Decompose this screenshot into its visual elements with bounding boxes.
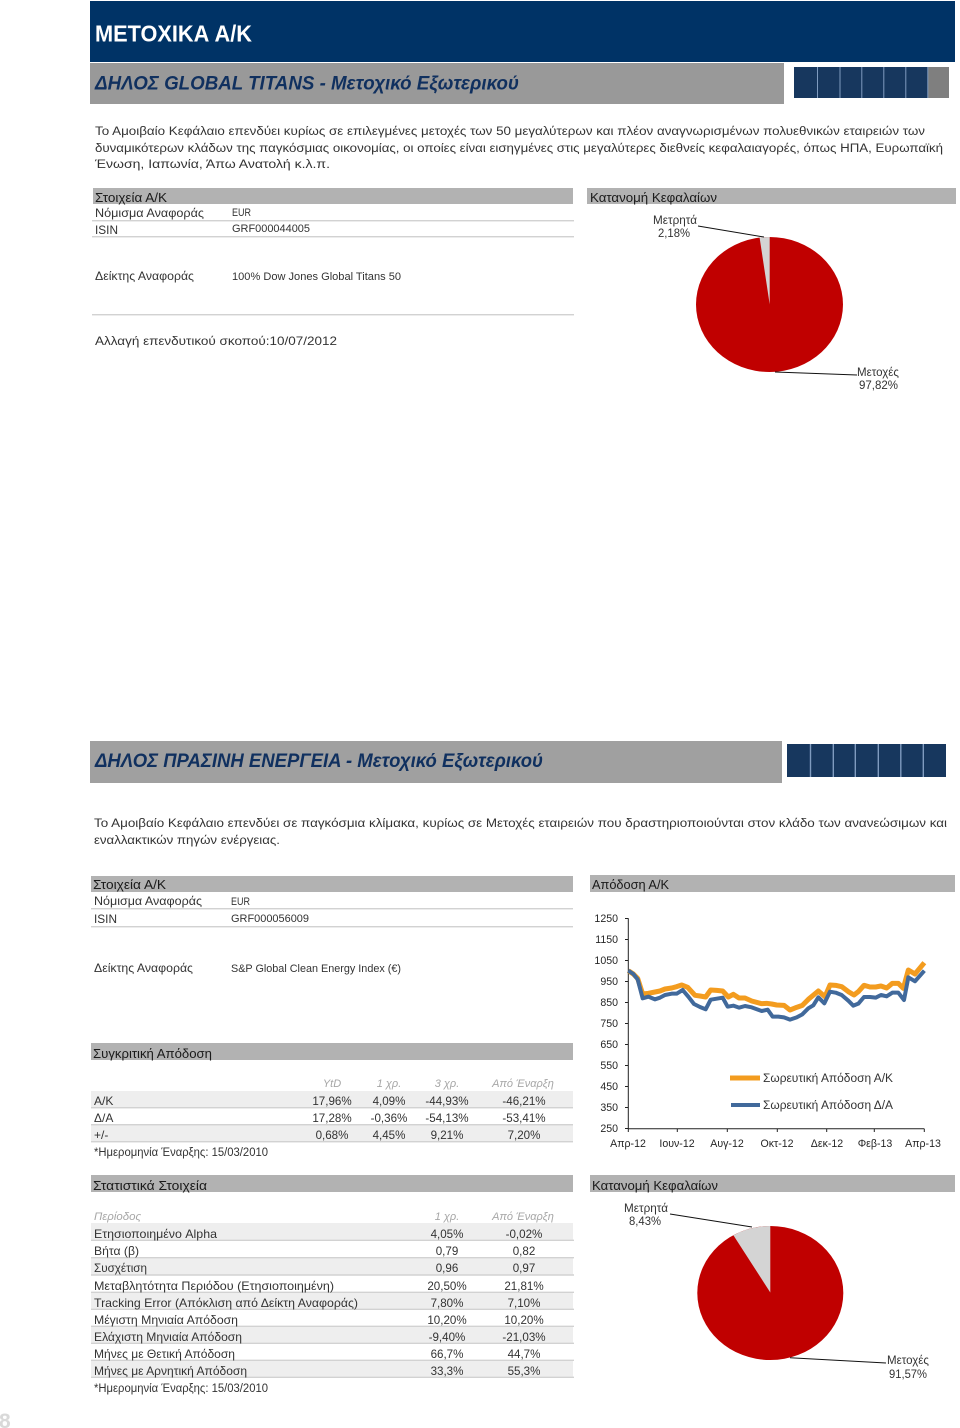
fund details table [91, 876, 573, 975]
cumulative performance line chart: Απρ-13 [905, 1138, 941, 1150]
title banner [90, 1, 955, 62]
statistics table: Μήνες με Θετική Απόδοση [94, 1347, 235, 1361]
cumulative performance line chart: Σωρευτική Απόδοση Δ/Α [763, 1100, 893, 1112]
comparative performance table: 17,96% [312, 1095, 352, 1108]
statistics table: Στατιστικά Στοιχεία [93, 1179, 207, 1193]
statistics table: Tracking Error (Απόκλιση από Δείκτη Αναφοράς) [94, 1296, 358, 1310]
fund description: εναλλακτικών πηγών ενέργειας. [94, 833, 280, 847]
comparative performance table: Συγκριτική Απόδοση [93, 1047, 212, 1061]
statistics table: 1 χρ. [435, 1211, 459, 1223]
fund heading bar [90, 741, 782, 783]
fund details table: GRF000044005 [232, 223, 310, 235]
comparative performance table: -0,36% [371, 1112, 407, 1125]
fund details table: Στοιχεία Α/Κ [93, 878, 167, 892]
fund description: δυναμικότερων κλάδων της παγκόσμιας οικονομίας, οι οποίες είναι εισηγμένες στις μεγαλύτερες διεθνείς κεφαλαιαγορές, όπως ΗΠΑ, Ευρωπαϊκή [95, 141, 943, 155]
comparative performance table: -46,21% [502, 1095, 546, 1108]
fund details table: Νόμισμα Αναφοράς [95, 206, 204, 220]
panel: Dilos Green Energy fund [90, 741, 955, 1395]
fund details table: GRF000056009 [231, 913, 309, 925]
statistics table: 0,79 [436, 1245, 458, 1258]
asset allocation pie chart: Μετοχές [887, 1355, 929, 1367]
comparative performance table: +/- [94, 1128, 108, 1142]
statistics table: *Ημερομηνία Έναρξης: 15/03/2010 [94, 1383, 268, 1395]
comparative performance table: Δ/Α [94, 1111, 113, 1125]
fund description: Ένωση, Ιαπωνία, Άπω Ανατολή κ.λ.π. [94, 157, 330, 171]
statistics table: 4,05% [431, 1228, 463, 1241]
cumulative performance line chart: Απόδοση Α/Κ [592, 878, 670, 892]
statistics table: 7,10% [508, 1297, 540, 1310]
statistics table: Συσχέτιση [94, 1261, 147, 1275]
fund description [94, 816, 947, 847]
asset allocation pie chart: 91,57% [889, 1369, 927, 1381]
asset allocation pie chart: Μετοχές [857, 367, 899, 379]
asset allocation pie chart: 97,82% [859, 380, 898, 392]
statistics table: 10,20% [504, 1314, 544, 1327]
comparative performance table: 0,68% [316, 1129, 348, 1142]
statistics table: 66,7% [431, 1348, 463, 1361]
risk scale icon [787, 744, 946, 777]
statistics table: 0,96 [436, 1262, 458, 1275]
fund details table: EUR [232, 207, 251, 219]
statistics table: Μήνες με Αρνητική Απόδοση [94, 1364, 247, 1378]
cumulative performance line chart: Ιουν-12 [659, 1138, 695, 1150]
risk scale icon [794, 67, 949, 98]
asset allocation pie chart: Κατανομή Κεφαλαίων [590, 191, 717, 205]
statistics table: Μέγιστη Μηνιαία Απόδοση [94, 1313, 238, 1327]
fund description: Το Αμοιβαίο Κεφάλαιο επενδύει κυρίως σε επιλεγμένες μετοχές των 50 μεγαλύτερων και πλέον αναγνωρισμένων πολυεθνικών εταιρειών των [95, 124, 925, 138]
cumulative performance line chart: 1150 [595, 934, 618, 946]
statistics table: 44,7% [508, 1348, 540, 1361]
asset allocation pie chart: 2,18% [658, 228, 690, 240]
comparative performance table: -54,13% [425, 1112, 469, 1125]
asset allocation pie chart: 8,43% [629, 1216, 661, 1228]
cumulative performance line chart: 950 [600, 976, 618, 988]
cumulative performance line chart: 850 [600, 997, 618, 1009]
cumulative performance line chart: 650 [600, 1039, 618, 1051]
statistics table: Βήτα (β) [94, 1244, 139, 1258]
comparative performance table: -53,41% [502, 1112, 546, 1125]
fund details table: 100% Dow Jones Global Titans 50 [232, 271, 401, 283]
cumulative performance line chart: Δεκ-12 [811, 1138, 843, 1150]
fund details table: Νόμισμα Αναφοράς [94, 894, 202, 908]
statistics table: 0,82 [513, 1245, 535, 1258]
cumulative performance line chart: Αυγ-12 [710, 1138, 744, 1150]
asset allocation pie chart: Κατανομή Κεφαλαίων [592, 1179, 718, 1193]
panel: Dilos Global Titans fund [90, 63, 956, 392]
cumulative performance line chart [590, 875, 955, 1150]
title banner: ΜΕΤΟΧΙΚΑ Α/Κ [95, 20, 252, 46]
statistics table: Από Έναρξη [491, 1211, 554, 1223]
fund details table [92, 188, 574, 348]
cumulative performance line chart: 1050 [594, 955, 618, 967]
cumulative performance line chart: 450 [600, 1081, 618, 1093]
cumulative performance line chart: Οκτ-12 [760, 1138, 794, 1150]
cumulative performance line chart: 250 [600, 1123, 618, 1135]
fund heading bar: ΔΗΛΟΣ GLOBAL TITANS - Μετοχικό Εξωτερικού [94, 74, 519, 94]
statistics table: -21,03% [502, 1331, 546, 1344]
comparative performance table: Από Έναρξη [491, 1078, 554, 1090]
fund details table: Αλλαγή επενδυτικού σκοπού:10/07/2012 [95, 334, 337, 348]
comparative performance table: 9,21% [431, 1129, 463, 1142]
comparative performance table: 1 χρ. [377, 1078, 401, 1090]
cumulative performance line chart: 1250 [594, 913, 618, 925]
asset allocation pie chart [587, 188, 956, 392]
statistics table: Ετησιοποιημένο Alpha [94, 1227, 217, 1241]
statistics table: 33,3% [431, 1365, 463, 1378]
cumulative performance line chart: Φεβ-13 [858, 1138, 892, 1150]
comparative performance table: 3 χρ. [435, 1078, 459, 1090]
fund details table: Στοιχεία Α/Κ [95, 191, 168, 205]
asset allocation pie chart: Μετρητά [624, 1203, 668, 1215]
comparative performance table: 4,09% [373, 1095, 405, 1108]
statistics table [91, 1175, 574, 1395]
statistics table: Μεταβλητότητα Περιόδου (Ετησιοποιημένη) [94, 1279, 334, 1293]
comparative performance table: YtD [323, 1078, 341, 1090]
comparative performance table [91, 1043, 573, 1159]
statistics table: 10,20% [427, 1314, 467, 1327]
comparative performance table: *Ημερομηνία Έναρξης: 15/03/2010 [94, 1147, 268, 1159]
fund description [94, 124, 943, 171]
statistics table: 55,3% [508, 1365, 540, 1378]
fund details table: ISIN [94, 912, 117, 926]
cumulative performance line chart: 550 [600, 1060, 618, 1072]
cumulative performance line chart: 350 [600, 1102, 618, 1114]
fund details table: S&P Global Clean Energy Index (€) [231, 963, 401, 975]
asset allocation pie chart: Μετρητά [653, 215, 697, 227]
fund description: Το Αμοιβαίο Κεφάλαιο επενδύει σε παγκόσμια κλίμακα, κυρίως σε Μετοχές εταιρειών που δραστηριοποιούνται στον κλάδο των ανανεώσιμων και [94, 816, 947, 830]
fund heading bar [90, 63, 784, 104]
statistics table: -0,02% [506, 1228, 542, 1241]
statistics table: 20,50% [427, 1280, 467, 1293]
asset allocation pie chart [590, 1175, 955, 1381]
comparative performance table: 17,28% [312, 1112, 352, 1125]
fund heading bar: ΔΗΛΟΣ ΠΡΑΣΙΝΗ ΕΝΕΡΓΕΙΑ - Μετοχικό Εξωτερικού [94, 751, 543, 772]
fund details table: Δείκτης Αναφοράς [95, 269, 194, 283]
comparative performance table: -44,93% [425, 1095, 469, 1108]
cumulative performance line chart: 750 [600, 1018, 618, 1030]
comparative performance table: 7,20% [508, 1129, 540, 1142]
statistics table: Ελάχιστη Μηνιαία Απόδοση [94, 1330, 242, 1344]
fund details table: Δείκτης Αναφοράς [94, 961, 193, 975]
cumulative performance line chart: Απρ-12 [610, 1138, 646, 1150]
comparative performance table: Α/Κ [94, 1094, 113, 1108]
statistics table: -9,40% [429, 1331, 465, 1344]
statistics table: Περίοδος [94, 1211, 142, 1223]
statistics table: 21,81% [504, 1280, 544, 1293]
cumulative performance line chart: Σωρευτική Απόδοση Α/Κ [763, 1073, 893, 1085]
fund details table: EUR [231, 896, 250, 908]
fund details table: ISIN [95, 223, 118, 237]
statistics table: 0,97 [513, 1262, 535, 1275]
statistics table: 7,80% [431, 1297, 463, 1310]
comparative performance table: 4,45% [373, 1129, 405, 1142]
